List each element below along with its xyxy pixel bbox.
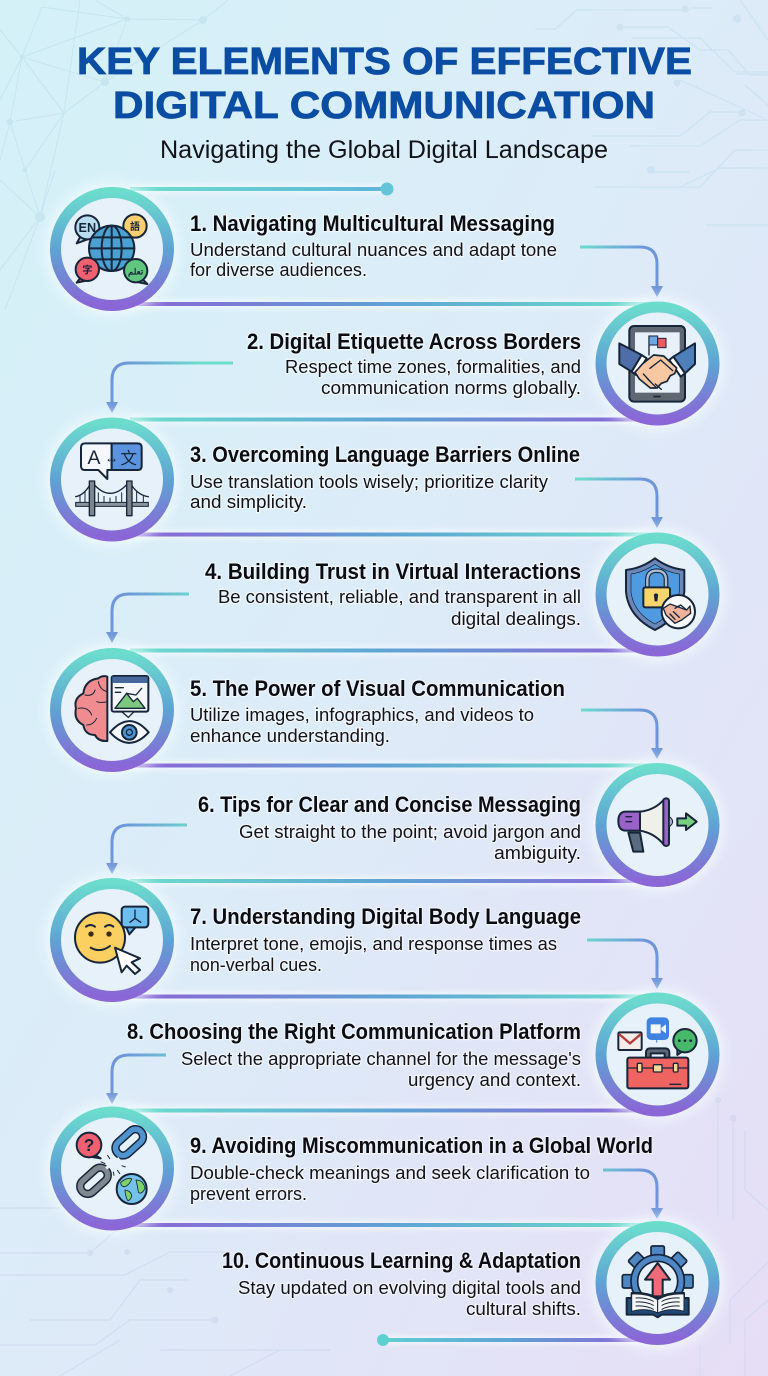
ring 3 <box>46 414 178 546</box>
step 5 heading: 5. The Power of Visual Communication <box>190 676 565 701</box>
step 1 text: Understand cultural nuances and adapt tone <box>190 240 557 260</box>
step 3 text: and simplicity. <box>190 492 307 512</box>
icon: translation bubble and bridge <box>76 443 148 516</box>
background network pattern top left <box>0 0 228 310</box>
step 7 text <box>190 934 557 975</box>
step 2 text: Respect time zones, formalities, and <box>285 357 581 377</box>
background circuit pattern top right <box>535 0 768 225</box>
step 8 text: urgency and context. <box>408 1070 581 1090</box>
arrow from step 2 to step 3 <box>106 363 233 413</box>
step 4 text <box>218 587 581 629</box>
arrow from step 9 to step 10 <box>603 1170 663 1219</box>
ring 4 <box>592 528 724 660</box>
step 2 panel <box>247 298 724 430</box>
step 6 text: Get straight to the point; avoid jargon and <box>239 822 581 842</box>
icon: globe with language bubbles: 字 <box>82 263 92 276</box>
icon: globe with language bubbles: EN <box>79 221 96 235</box>
step 9 text <box>190 1163 590 1204</box>
icon: smiley, clock bubble and cursor <box>75 907 148 974</box>
ring 2 <box>592 298 724 430</box>
step 8 heading: 8. Choosing the Right Communication Platform <box>127 1019 581 1044</box>
icon: globe with language bubbles: 語 <box>130 220 140 233</box>
ring 5 <box>46 644 178 776</box>
step 2 text: communication norms globally. <box>321 378 581 398</box>
ring 8 <box>592 988 724 1120</box>
step 10 text <box>238 1278 581 1319</box>
icon: broken chain, question bubble and globe <box>77 1126 147 1204</box>
step 9 heading: 9. Avoiding Miscommunication in a Global World <box>190 1133 653 1158</box>
ring 10 <box>592 1217 724 1349</box>
title: DIGITAL COMMUNICATION <box>113 85 655 127</box>
arrow from step 7 to step 8 <box>587 940 663 989</box>
arrow from step 6 to step 7 <box>106 825 187 874</box>
step 9 panel <box>46 1102 653 1234</box>
step 5 text: Utilize images, infographics, and videos to <box>190 705 534 725</box>
title: KEY ELEMENTS OF EFFECTIVE <box>77 41 692 83</box>
step 3 heading: 3. Overcoming Language Barriers Online <box>190 442 580 467</box>
icon: handshake on tablet <box>619 326 695 402</box>
icon: shield lock with handshake <box>626 558 695 630</box>
ring 7 <box>46 874 178 1006</box>
step 1 text: for diverse audiences. <box>190 260 367 280</box>
ring 6 <box>592 759 724 891</box>
step 10 panel <box>222 1217 724 1349</box>
step 10 heading: 10. Continuous Learning & Adaptation <box>222 1248 581 1273</box>
step 5 text <box>190 705 534 746</box>
subtitle: Navigating the Global Digital Landscape <box>160 136 608 164</box>
step 5 text: enhance understanding. <box>190 726 390 746</box>
step 4 text: digital dealings. <box>451 609 581 629</box>
step 7 panel <box>46 874 581 1006</box>
icon: megaphone with arrow <box>618 798 697 852</box>
icon: gear, arrow and open book <box>622 1246 693 1317</box>
step 6 panel <box>198 759 724 891</box>
step 9 text: prevent errors. <box>190 1184 307 1204</box>
step 3 panel <box>46 414 580 546</box>
icon: translation bubble and bridge: A <box>88 448 101 469</box>
icon: globe with language bubbles: تعلم <box>128 267 144 278</box>
step 4 panel <box>205 528 724 660</box>
step 5 panel <box>46 644 565 776</box>
step 2 text <box>285 357 581 398</box>
step 6 heading: 6. Tips for Clear and Concise Messaging <box>198 792 581 817</box>
ring 1 <box>46 183 178 315</box>
step 7 text: Interpret tone, emojis, and response times as <box>190 934 557 954</box>
arrow from step 3 to step 4 <box>575 479 663 528</box>
step 4 heading: 4. Building Trust in Virtual Interactions <box>205 559 581 584</box>
arrow from step 1 to step 2 <box>580 247 663 297</box>
icon: translation bubble and bridge: 文 <box>120 449 137 468</box>
step 3 text <box>190 472 548 512</box>
step 7 heading: 7. Understanding Digital Body Language <box>190 904 581 929</box>
step 9 text: Double-check meanings and seek clarification to <box>190 1163 590 1183</box>
step 7 text: non-verbal cues. <box>190 955 322 975</box>
arrow from step 5 to step 6 <box>581 710 663 759</box>
step 4 text: Be consistent, reliable, and transparent in all <box>218 587 581 607</box>
step 10 text: Stay updated on evolving digital tools and <box>238 1278 581 1298</box>
step 8 text <box>181 1049 581 1090</box>
step 2 heading: 2. Digital Etiquette Across Borders <box>247 329 581 354</box>
background circuit pattern bottom <box>0 1097 768 1376</box>
step 6 text <box>239 822 581 863</box>
step 8 panel <box>127 988 724 1120</box>
icon: broken chain, question bubble and globe: ? <box>84 1135 94 1155</box>
step 1 heading: 1. Navigating Multicultural Messaging <box>190 211 555 236</box>
step 10 text: cultural shifts. <box>466 1299 581 1319</box>
step 3 text: Use translation tools wisely; prioritize clarity <box>190 472 548 492</box>
arrow from step 4 to step 5 <box>106 594 189 643</box>
step 8 text: Select the appropriate channel for the message's <box>181 1049 581 1069</box>
ring 9 <box>46 1102 178 1234</box>
step 6 text: ambiguity. <box>494 843 581 863</box>
step 1 panel <box>46 183 557 315</box>
icon: toolbox with mail, video and chat <box>618 1017 697 1088</box>
title <box>77 41 692 127</box>
icon: globe with language bubbles <box>75 214 147 284</box>
icon: brain, chart window and eye <box>75 676 149 743</box>
arrow from step 8 to step 9 <box>106 1055 166 1104</box>
icon: translation bubble and bridge: ↔ <box>105 450 119 466</box>
timeline connector lines <box>130 182 650 1346</box>
step 1 text <box>190 240 557 280</box>
